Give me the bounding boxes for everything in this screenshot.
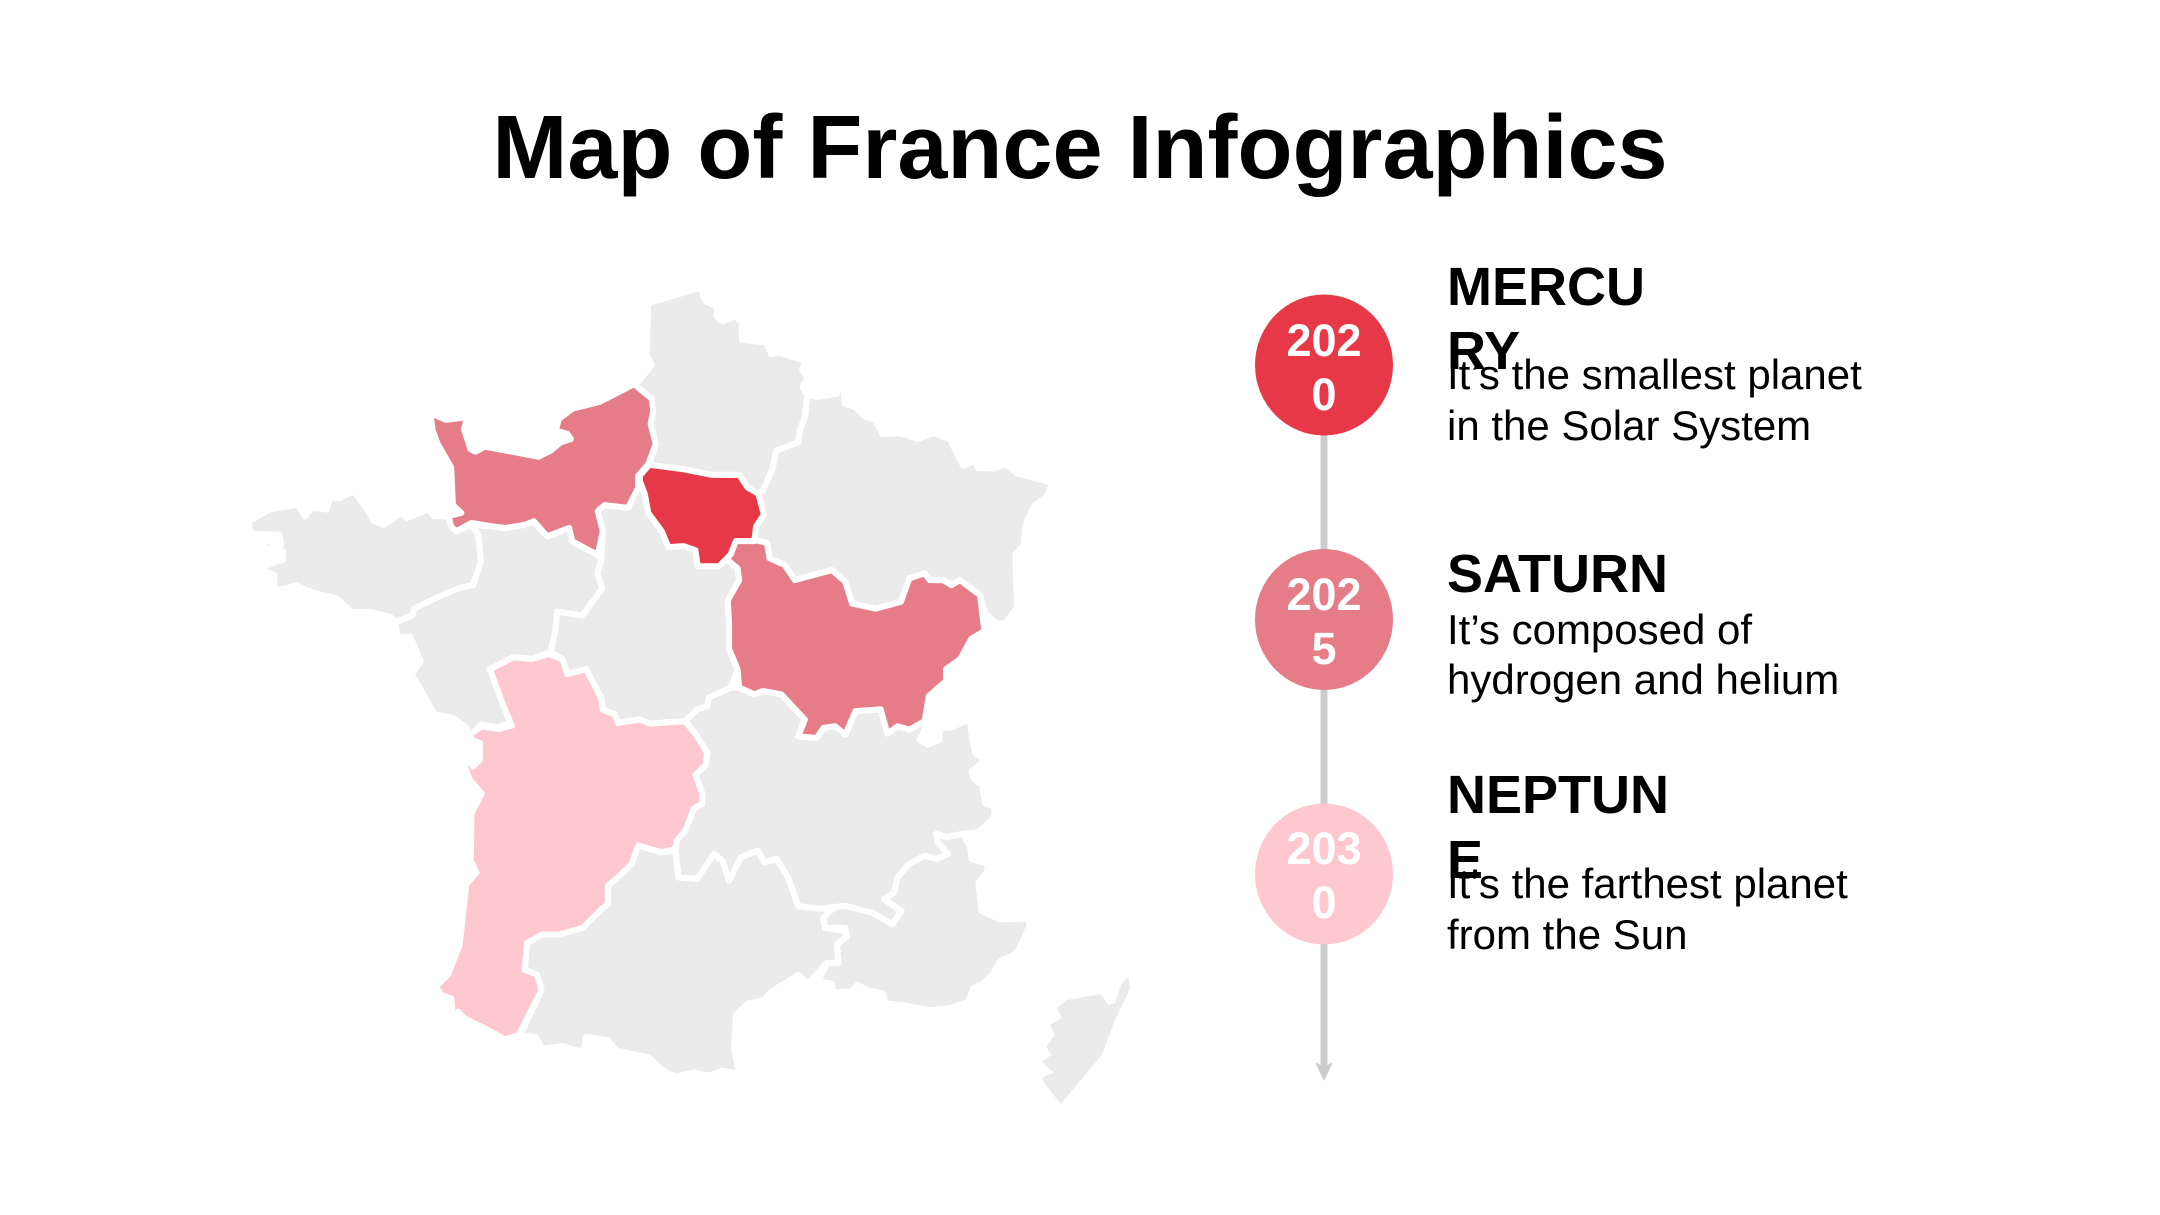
- text block: Saturn: hydrogen and helium: [1447, 656, 1839, 703]
- map of France: [249, 288, 1130, 1104]
- region: Nouvelle-Aquitaine: [436, 654, 707, 1039]
- text block: Neptune: NEPTUN: [1447, 765, 1669, 825]
- text block: Neptune: E: [1447, 830, 1483, 890]
- text block: Mercury: RY: [1447, 321, 1520, 381]
- region: Bretagne: [249, 491, 481, 622]
- year marker 2025: [1255, 549, 1393, 690]
- region: Provence-Alpes-Cote d'Azur: [818, 834, 1030, 1010]
- title: Map of France Infographics: [492, 98, 1668, 198]
- text block: Saturn: [1447, 544, 1839, 703]
- text block: Mercury: It’s the smallest planet: [1447, 351, 1862, 398]
- region: Pays de la Loire: [396, 521, 602, 735]
- year marker 2020: [1255, 294, 1393, 436]
- region: Grand Est: [754, 376, 1052, 624]
- text block: Saturn: SATURN: [1447, 544, 1668, 604]
- year marker 2025: 5: [1311, 623, 1337, 674]
- region: Corsica: [1042, 977, 1130, 1104]
- mainland regions: [249, 288, 1052, 1076]
- text block: Mercury: MERCU: [1447, 257, 1645, 317]
- text block: Saturn: It’s composed of: [1447, 606, 1752, 653]
- region: Auvergne-Rhone-Alpes: [675, 688, 995, 924]
- text block: Neptune: It’s the farthest planet: [1447, 860, 1848, 907]
- region: Hauts-de-France: [634, 288, 808, 494]
- year marker 2020: 0: [1311, 369, 1337, 420]
- region: Normandie: [430, 384, 656, 555]
- year marker 2030: 0: [1311, 877, 1337, 928]
- text block: Neptune: [1447, 765, 1848, 958]
- year marker 2025: 202: [1286, 569, 1362, 620]
- text block: Neptune: from the Sun: [1447, 911, 1687, 958]
- year marker 2030: 203: [1286, 823, 1362, 874]
- region: Ile-de-France: [640, 465, 764, 566]
- text block: Mercury: [1447, 257, 1862, 449]
- year marker 2030: [1255, 804, 1393, 944]
- text block: Mercury: in the Solar System: [1447, 402, 1811, 449]
- region: Bourgogne-Franche-Comte: [727, 540, 984, 738]
- region: Occitanie: [520, 846, 847, 1076]
- year marker 2020: 202: [1286, 315, 1362, 366]
- region: Centre-Val de Loire: [551, 481, 739, 724]
- timeline line with arrow: [1315, 430, 1333, 1081]
